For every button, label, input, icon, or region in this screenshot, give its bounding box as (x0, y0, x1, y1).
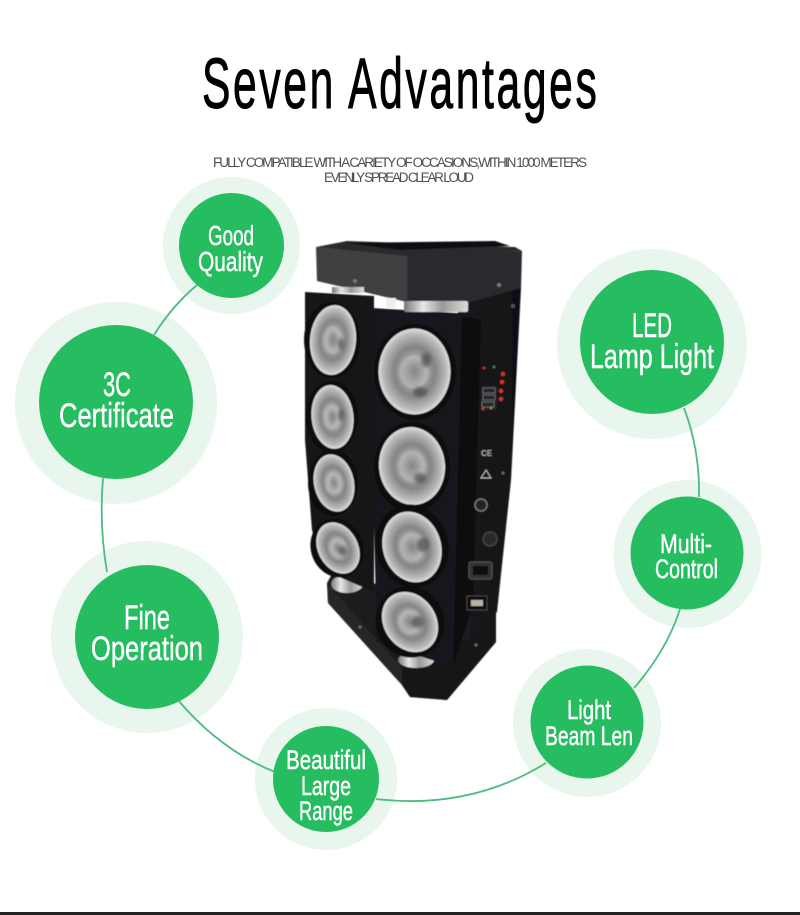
title: Seven Advantages (202, 45, 597, 124)
badge: Multi-Control (630, 496, 744, 610)
halo rings (15, 177, 762, 850)
badge: 3C Certificate: Certificate (59, 397, 174, 435)
subtitle (213, 155, 587, 185)
badge: Beautiful Large Range (273, 726, 379, 832)
badge: Light Beam Len (530, 666, 644, 778)
badge: 3C Certificate (39, 325, 193, 479)
lens highlights (325, 328, 427, 633)
top housing (316, 241, 522, 312)
badge: LED Lamp Light: LED (632, 307, 672, 345)
badge: Light Beam Len: Beam Len (545, 721, 633, 751)
control panel on side: CE (481, 449, 493, 458)
badge: Fine Operation: Operation (91, 630, 203, 668)
control panel on side (467, 366, 505, 610)
badge: Multi-Control: Control (655, 554, 718, 584)
badge: 3C Certificate: 3C (103, 366, 131, 404)
badge: Beautiful Large Range: Beautiful (286, 745, 366, 775)
badge: Light Beam Len: Light (567, 695, 611, 725)
subtitle: FULLY COMPATIBLE WITH A CARIETY OF OCCASIONS,WITHIN 1000 METERS (213, 155, 587, 170)
badge: Multi-Control: Multi- (660, 529, 712, 559)
rear side panel (458, 288, 521, 640)
badge: Fine Operation (75, 565, 219, 709)
lenses: left column (302, 302, 372, 586)
badge: Beautiful Large Range: Range (299, 796, 353, 826)
lenses: right column (364, 324, 458, 669)
connecting arc (102, 285, 699, 801)
badge: Beautiful Large Range: Large (301, 771, 351, 801)
base unit (327, 572, 496, 700)
product: spider moving head light (302, 241, 522, 700)
right head column (325, 308, 481, 669)
badge: Good Quality: Quality (198, 246, 263, 277)
left head column (302, 292, 374, 592)
badge: Good Quality: Good (208, 220, 254, 251)
bottom bar (0, 912, 800, 915)
badge: Fine Operation: Fine (124, 599, 170, 637)
subtitle: EVENLY SPREAD CLEAR LOUD (324, 170, 474, 185)
badge: LED Lamp Light (580, 270, 724, 414)
badge: Good Quality (179, 193, 284, 298)
badge: LED Lamp Light: Lamp Light (590, 338, 714, 376)
